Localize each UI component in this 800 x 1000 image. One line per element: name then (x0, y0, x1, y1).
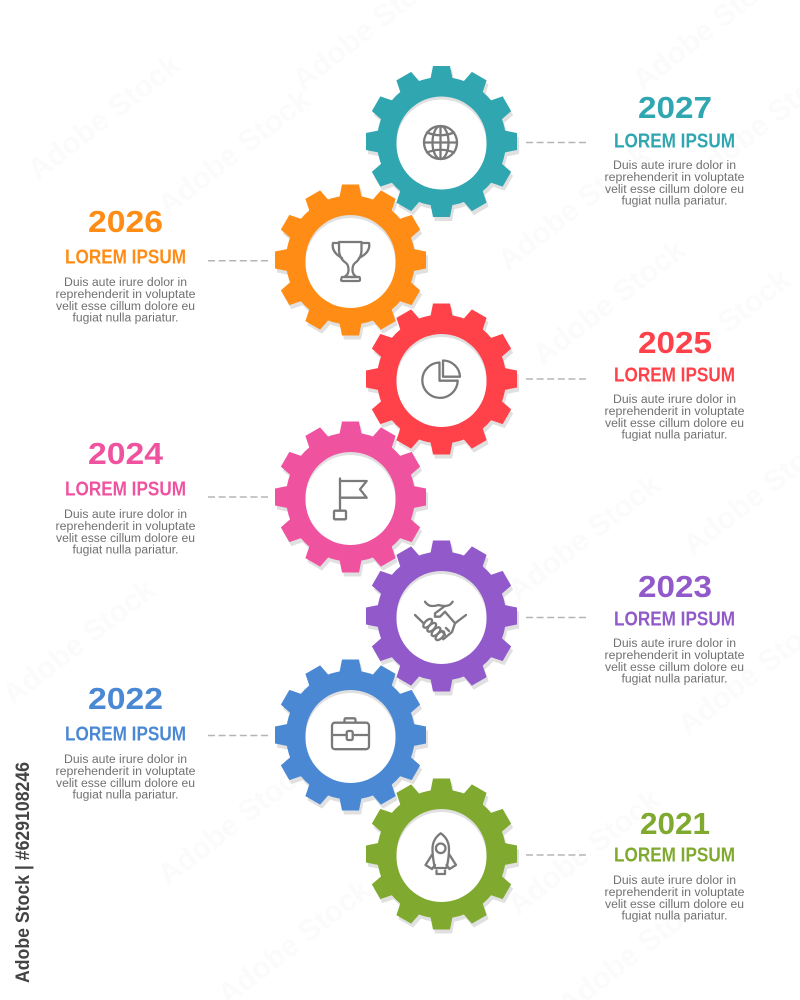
text block 2022: 2022 (88, 681, 163, 716)
text block 2021: 2021 (640, 806, 710, 841)
text block 2022: Duis aute irure dolor in (64, 754, 187, 766)
text block 2021: velit esse cillum dolore eu (605, 899, 744, 911)
stock credit: Adobe Stock | #629108246 (13, 762, 34, 983)
text: Adobe Stock (152, 753, 317, 892)
text: Adobe Stock (22, 48, 187, 187)
text block 2025: LOREM IPSUM (614, 365, 735, 387)
text block 2023: reprehenderit in voluptate (604, 650, 744, 662)
text block 2023: velit esse cillum dolore eu (605, 662, 744, 674)
text block 2023: Duis aute irure dolor in (613, 638, 736, 650)
connector 2022 (208, 734, 269, 736)
text block 2027: Duis aute irure dolor in (613, 160, 736, 172)
text: Adobe Stock (492, 138, 657, 277)
text block 2021: LOREM IPSUM (614, 845, 735, 867)
text: Adobe Stock (152, 83, 317, 222)
text block 2026: reprehenderit in voluptate (56, 289, 196, 301)
text block 2024: 2024 (88, 436, 164, 471)
text block 2026: LOREM IPSUM (65, 247, 186, 269)
text block 2021: reprehenderit in voluptate (604, 887, 744, 899)
text: Adobe Stock (502, 783, 667, 922)
text block 2026: fugiat nulla pariatur. (72, 312, 178, 324)
icon: trophy (333, 242, 369, 281)
text block 2025: fugiat nulla pariatur. (622, 430, 728, 442)
text block 2027 (604, 90, 744, 208)
connector 2021 (526, 854, 587, 856)
text block 2027: reprehenderit in voluptate (604, 172, 744, 184)
gear 2025 red (366, 304, 519, 458)
icon: handshake (415, 602, 466, 642)
icon: briefcase (332, 718, 369, 749)
text block 2026 (56, 204, 196, 324)
text: Adobe Stock (632, 263, 797, 402)
text block 2024: Duis aute irure dolor in (64, 509, 187, 521)
icon: rocket (426, 833, 456, 874)
icon: flag (334, 478, 367, 519)
gear 2027 teal (366, 66, 519, 221)
connector 2026 (208, 260, 269, 262)
text block 2027: fugiat nulla pariatur. (622, 196, 728, 208)
gear 2023 purple (366, 540, 519, 696)
text block 2023: LOREM IPSUM (614, 609, 735, 631)
connector 2023 (526, 616, 587, 618)
icon: pie chart (422, 360, 460, 398)
text block 2022 (56, 681, 196, 802)
text block 2024: velit esse cillum dolore eu (56, 533, 195, 545)
text block 2022: velit esse cillum dolore eu (56, 778, 195, 790)
text: Adobe Stock (527, 233, 692, 372)
text block 2025 (604, 325, 744, 442)
text block 2027: LOREM IPSUM (614, 131, 735, 153)
text: Adobe Stock (502, 468, 667, 607)
icon: globe (424, 126, 457, 159)
connector 2024 (208, 496, 269, 498)
text: Adobe Stock (0, 573, 162, 712)
text block 2023: 2023 (638, 569, 712, 604)
text block 2025: reprehenderit in voluptate (604, 406, 744, 418)
gear 2026 orange (275, 184, 428, 340)
connector 2027 (526, 142, 587, 144)
text block 2025: velit esse cillum dolore eu (605, 418, 744, 430)
text block 2023 (604, 569, 744, 686)
connector 2025 (526, 378, 587, 380)
text block 2024: reprehenderit in voluptate (56, 521, 196, 533)
gear 2021 green (366, 778, 519, 934)
text block 2023: fugiat nulla pariatur. (622, 674, 728, 686)
text block 2022: LOREM IPSUM (65, 724, 186, 746)
text block 2027: 2027 (638, 90, 712, 125)
text block 2022: reprehenderit in voluptate (56, 766, 196, 778)
text block 2021: fugiat nulla pariatur. (622, 910, 728, 922)
text block 2025: Duis aute irure dolor in (613, 394, 736, 406)
text block 2025: 2025 (638, 325, 712, 360)
text block 2022: fugiat nulla pariatur. (72, 790, 178, 802)
text block 2026: 2026 (88, 204, 163, 239)
text block 2027: velit esse cillum dolore eu (605, 184, 744, 196)
gear 2022 blue (275, 660, 428, 814)
text block 2021: Duis aute irure dolor in (613, 875, 736, 887)
text block 2024 (56, 436, 196, 556)
text block 2021 (604, 806, 744, 922)
text block 2024: LOREM IPSUM (65, 479, 186, 501)
text block 2024: fugiat nulla pariatur. (72, 544, 178, 556)
text block 2026: Duis aute irure dolor in (64, 277, 187, 289)
text block 2026: velit esse cillum dolore eu (56, 301, 195, 313)
gear 2024 pink (275, 422, 428, 576)
